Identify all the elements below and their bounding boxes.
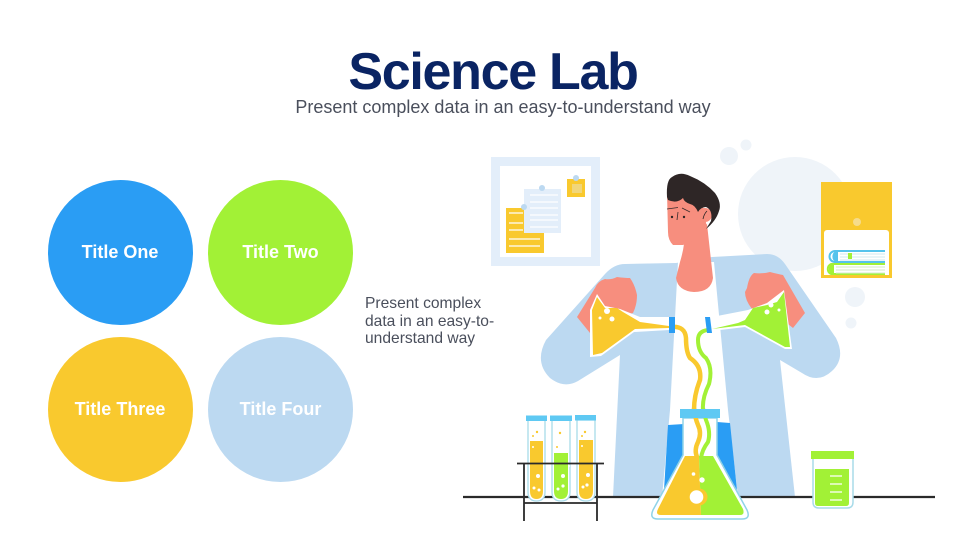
left hand xyxy=(577,277,637,333)
background bubbles xyxy=(720,140,865,328)
hair xyxy=(667,174,720,229)
face details xyxy=(667,208,690,220)
description text: Present complex xyxy=(365,295,481,312)
trousers xyxy=(664,422,737,490)
circle: title two xyxy=(208,180,353,325)
circle: title three xyxy=(48,337,192,482)
title: Science Lab xyxy=(348,43,638,101)
circle: title three: Title Three xyxy=(75,399,165,419)
description text: data in an easy-to- xyxy=(365,312,494,330)
tube clips xyxy=(669,317,712,333)
notice board xyxy=(491,157,600,266)
circle: title four: Title Four xyxy=(240,399,321,419)
lab coat xyxy=(541,254,840,497)
test tube rack xyxy=(517,464,604,521)
shirt xyxy=(662,262,738,497)
floor line xyxy=(463,496,935,498)
right flask xyxy=(712,290,792,349)
subtitle: Present complex data in an easy-to-understand way xyxy=(295,97,711,117)
large conical flask xyxy=(652,408,748,519)
left flask xyxy=(590,294,669,357)
test tubes xyxy=(526,415,596,501)
circle: title one: Title One xyxy=(82,242,158,262)
neck and head xyxy=(667,174,720,292)
poster with books xyxy=(821,182,892,278)
beaker xyxy=(811,451,854,508)
circle: title two: Title Two xyxy=(242,242,319,262)
circle: title four xyxy=(208,337,353,482)
circle: title one xyxy=(48,180,192,325)
description text xyxy=(365,295,494,347)
description text: understand way xyxy=(365,330,475,347)
pouring streams xyxy=(672,327,710,410)
right hand xyxy=(745,272,805,328)
